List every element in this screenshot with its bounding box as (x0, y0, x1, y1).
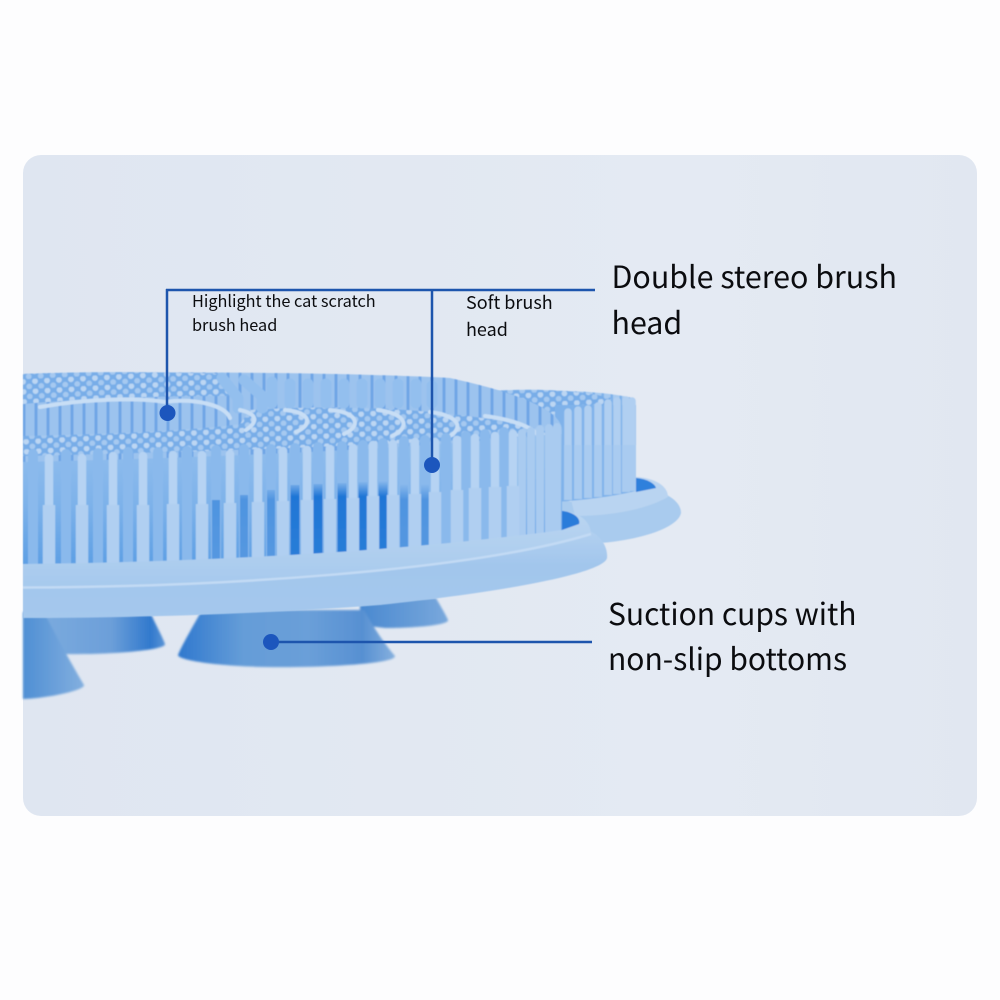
leader: soft brush (431, 289, 433, 465)
product: rear brush section (440, 390, 681, 545)
callout: suction cup leader (263, 634, 592, 650)
rear bristles upper (568, 400, 632, 445)
rear bristles wall (555, 405, 636, 502)
marker dot: soft brush (424, 457, 440, 473)
tall ridge bristles (222, 378, 432, 408)
curved bristle arcs (40, 399, 540, 438)
front row bristles lower (49, 486, 513, 566)
product: front brush section (23, 372, 607, 618)
suction cup: far left (23, 612, 84, 699)
front row bristles upper (49, 434, 513, 506)
suction cup: left (45, 612, 165, 654)
leader: horizontal line (166, 289, 595, 291)
heading: double stereo brush head: Double stereo brush (612, 253, 897, 297)
rear plate ridge (570, 477, 668, 516)
front base plate lower band (23, 530, 607, 618)
back dotted field (23, 372, 228, 404)
label: soft brush head: Soft brush (466, 289, 553, 315)
rear plate recess (636, 478, 656, 492)
marker dot: suction cup (263, 634, 279, 650)
back row bristles (33, 432, 504, 566)
front plate recess (562, 511, 579, 530)
front dotted field (23, 407, 555, 456)
rear base plate (540, 495, 681, 545)
front base plate ring (23, 511, 591, 587)
suction cup: main (178, 610, 395, 667)
front brush top surface (23, 372, 562, 470)
label: highlight the cat scratch brush head: Highlight the cat scratch (192, 288, 376, 312)
rear brush top surface (440, 390, 634, 425)
rear bristles lower (568, 445, 632, 500)
dark gaps between bristles (295, 481, 383, 558)
label: highlight the cat scratch brush head: brush head (192, 312, 277, 336)
heading: double stereo brush head: head (612, 299, 682, 343)
suction cup: back right (360, 598, 448, 628)
right edge bristles (522, 427, 557, 537)
dark gaps fading right (216, 484, 425, 562)
plate ridge highlight (23, 534, 591, 588)
heading: suction cups with non-slip bottoms: non-slip bottoms (608, 635, 847, 679)
callout lines: double stereo brush head (160, 289, 595, 473)
front bristles wall (23, 434, 562, 566)
heading: suction cups with non-slip bottoms: Suction cups with (608, 590, 857, 634)
leader: highlight cat scratch (166, 289, 168, 412)
label: soft brush head: head (466, 316, 508, 342)
background panel (23, 155, 977, 816)
product: suction cups (23, 598, 448, 699)
marker dot: cat scratch (160, 405, 176, 421)
